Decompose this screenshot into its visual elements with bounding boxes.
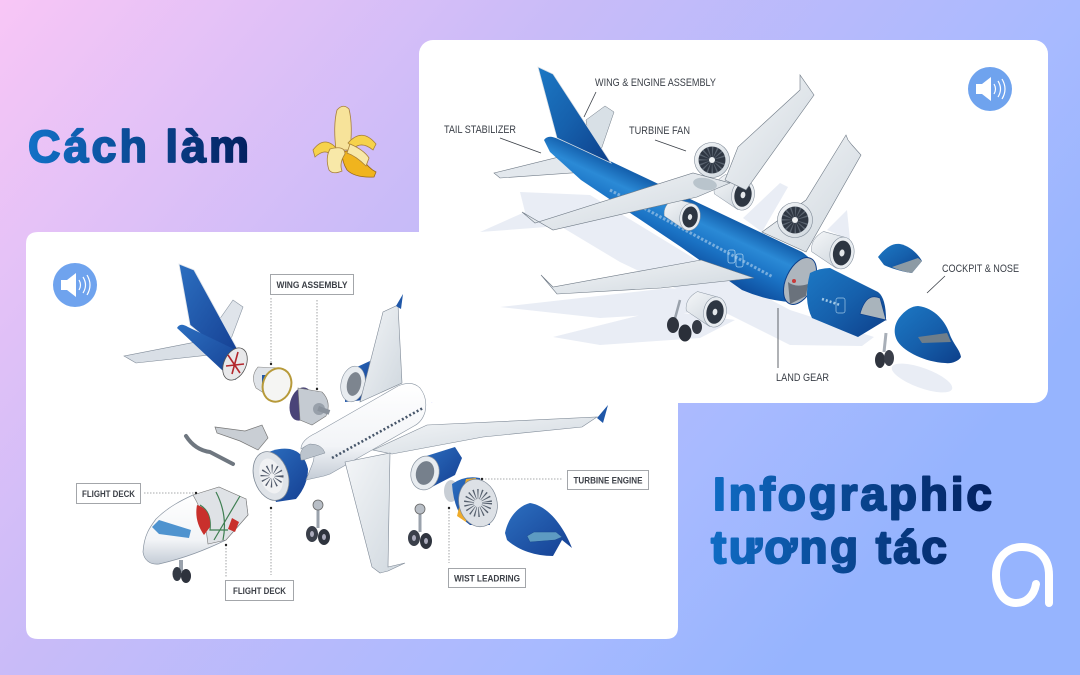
icon: banana [313,106,376,177]
label: land gear: LAND GEAR [776,372,829,384]
far wing 1 [694,75,814,212]
part: motor [286,385,330,425]
part: tail section [124,264,252,384]
part: nose gear [172,560,191,583]
label: land gear [776,308,829,384]
part: fuselage white wing far [338,294,403,404]
fuselage blue [538,67,823,310]
part: turbine with yellow band [444,475,503,531]
part: ring [253,364,296,406]
title: Infographic tương tác: Infographic [713,468,992,520]
title: Cách làm: Cách làm [28,121,249,172]
canopy [878,244,922,273]
part: white nose [143,487,248,564]
label: turbine fan: TURBINE FAN [629,125,690,137]
label: tail stabilizer [444,124,541,153]
label: wist leadring [448,568,526,588]
wing detail patch [692,176,718,192]
label: flight deck left [76,484,140,504]
part: blue canopy [505,503,572,556]
part: bracket [215,425,268,450]
panel: exploded white plane [26,232,678,639]
label: wing and engine assembly [584,77,717,117]
ground shadows [480,183,955,398]
near wing lower [541,260,754,294]
label: cockpit and nose: COCKPIT & NOSE [942,263,1019,275]
label: cockpit and nose [927,263,1019,293]
nose [895,306,961,363]
label: tail stabilizer: TAIL STABILIZER [444,124,516,136]
label: flight deck bottom: FLIGHT DECK [233,586,286,597]
title: Infographic tương tác: tương tác [711,521,947,573]
label: wing assembly: WING ASSEMBLY [276,280,348,291]
panel: blue plane [419,40,1048,403]
dotted leaders [144,298,562,577]
label: wing and engine assembly: WING & ENGINE ASSEMBLY [595,77,717,89]
label: flight deck left: FLIGHT DECK [82,489,135,500]
label: turbine fan [629,125,690,151]
label: wist leadring: WIST LEADRING [454,574,520,584]
part: wings white [345,405,608,573]
icon: speaker upper [968,67,1012,111]
part: engine below wing [407,447,462,493]
part: pipe [186,436,233,464]
part: white fuselage [300,383,426,480]
icon: logo [996,547,1049,603]
engine with landing gear [667,290,729,342]
label: flight deck bottom [226,580,294,600]
engine under fuselage [662,197,703,232]
part: landing gear left [306,500,330,545]
fuselage section [807,268,886,337]
far wing 2 with engines [762,135,861,271]
icon: speaker lower [53,263,97,307]
nose gear [875,333,894,368]
near wing upper [522,173,730,230]
far stabilizer [586,106,614,150]
label: turbine engine [568,470,648,490]
part: landing gear right [408,504,432,549]
tail stabilizer left [494,157,585,178]
label: turbine engine: TURBINE ENGINE [574,476,642,486]
title: Infographic tương tác [711,468,992,573]
label: wing assembly [270,274,354,294]
part: blue engine [247,447,308,505]
